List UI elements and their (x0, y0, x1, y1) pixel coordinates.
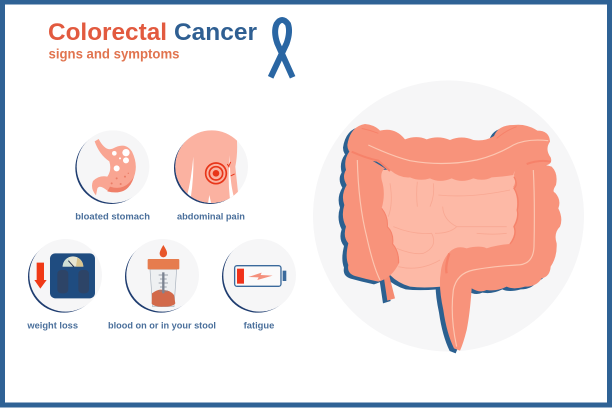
icon: bathroom scale (28, 239, 102, 313)
label: bloated stomach: bloated stomach (75, 212, 150, 222)
title: Cancer (174, 19, 257, 46)
label: abdominal pain: abdominal pain (177, 212, 245, 222)
label: weight loss: weight loss (26, 320, 78, 330)
panel: fatigue (222, 239, 296, 330)
label: fatigue: fatigue (244, 320, 274, 330)
small intestine mass (375, 167, 527, 287)
title: Colorectal (48, 19, 167, 46)
panel: abdominal pain (173, 128, 248, 222)
descending and sigmoid colon (440, 164, 561, 351)
colon shadow (339, 127, 557, 353)
icon: down arrow (34, 263, 47, 289)
panel: large intestine illustration (313, 80, 584, 353)
label: blood on or in your stool: blood on or in your stool (108, 320, 216, 330)
icon: awareness ribbon (271, 20, 293, 77)
icon: specimen jar (125, 239, 199, 313)
transverse colon (347, 124, 551, 181)
ascending colon (343, 152, 399, 282)
panel: blood in stool (108, 239, 216, 330)
colon folds and highlights (352, 127, 551, 347)
panel: bloated stomach (75, 130, 150, 222)
icon: stomach (75, 130, 149, 204)
title (48, 19, 257, 62)
appendix (384, 276, 395, 301)
panel: weight loss (26, 239, 102, 330)
title: signs and symptoms (48, 46, 180, 62)
icon: abdomen with target (173, 128, 248, 205)
icon: low battery (222, 239, 296, 313)
